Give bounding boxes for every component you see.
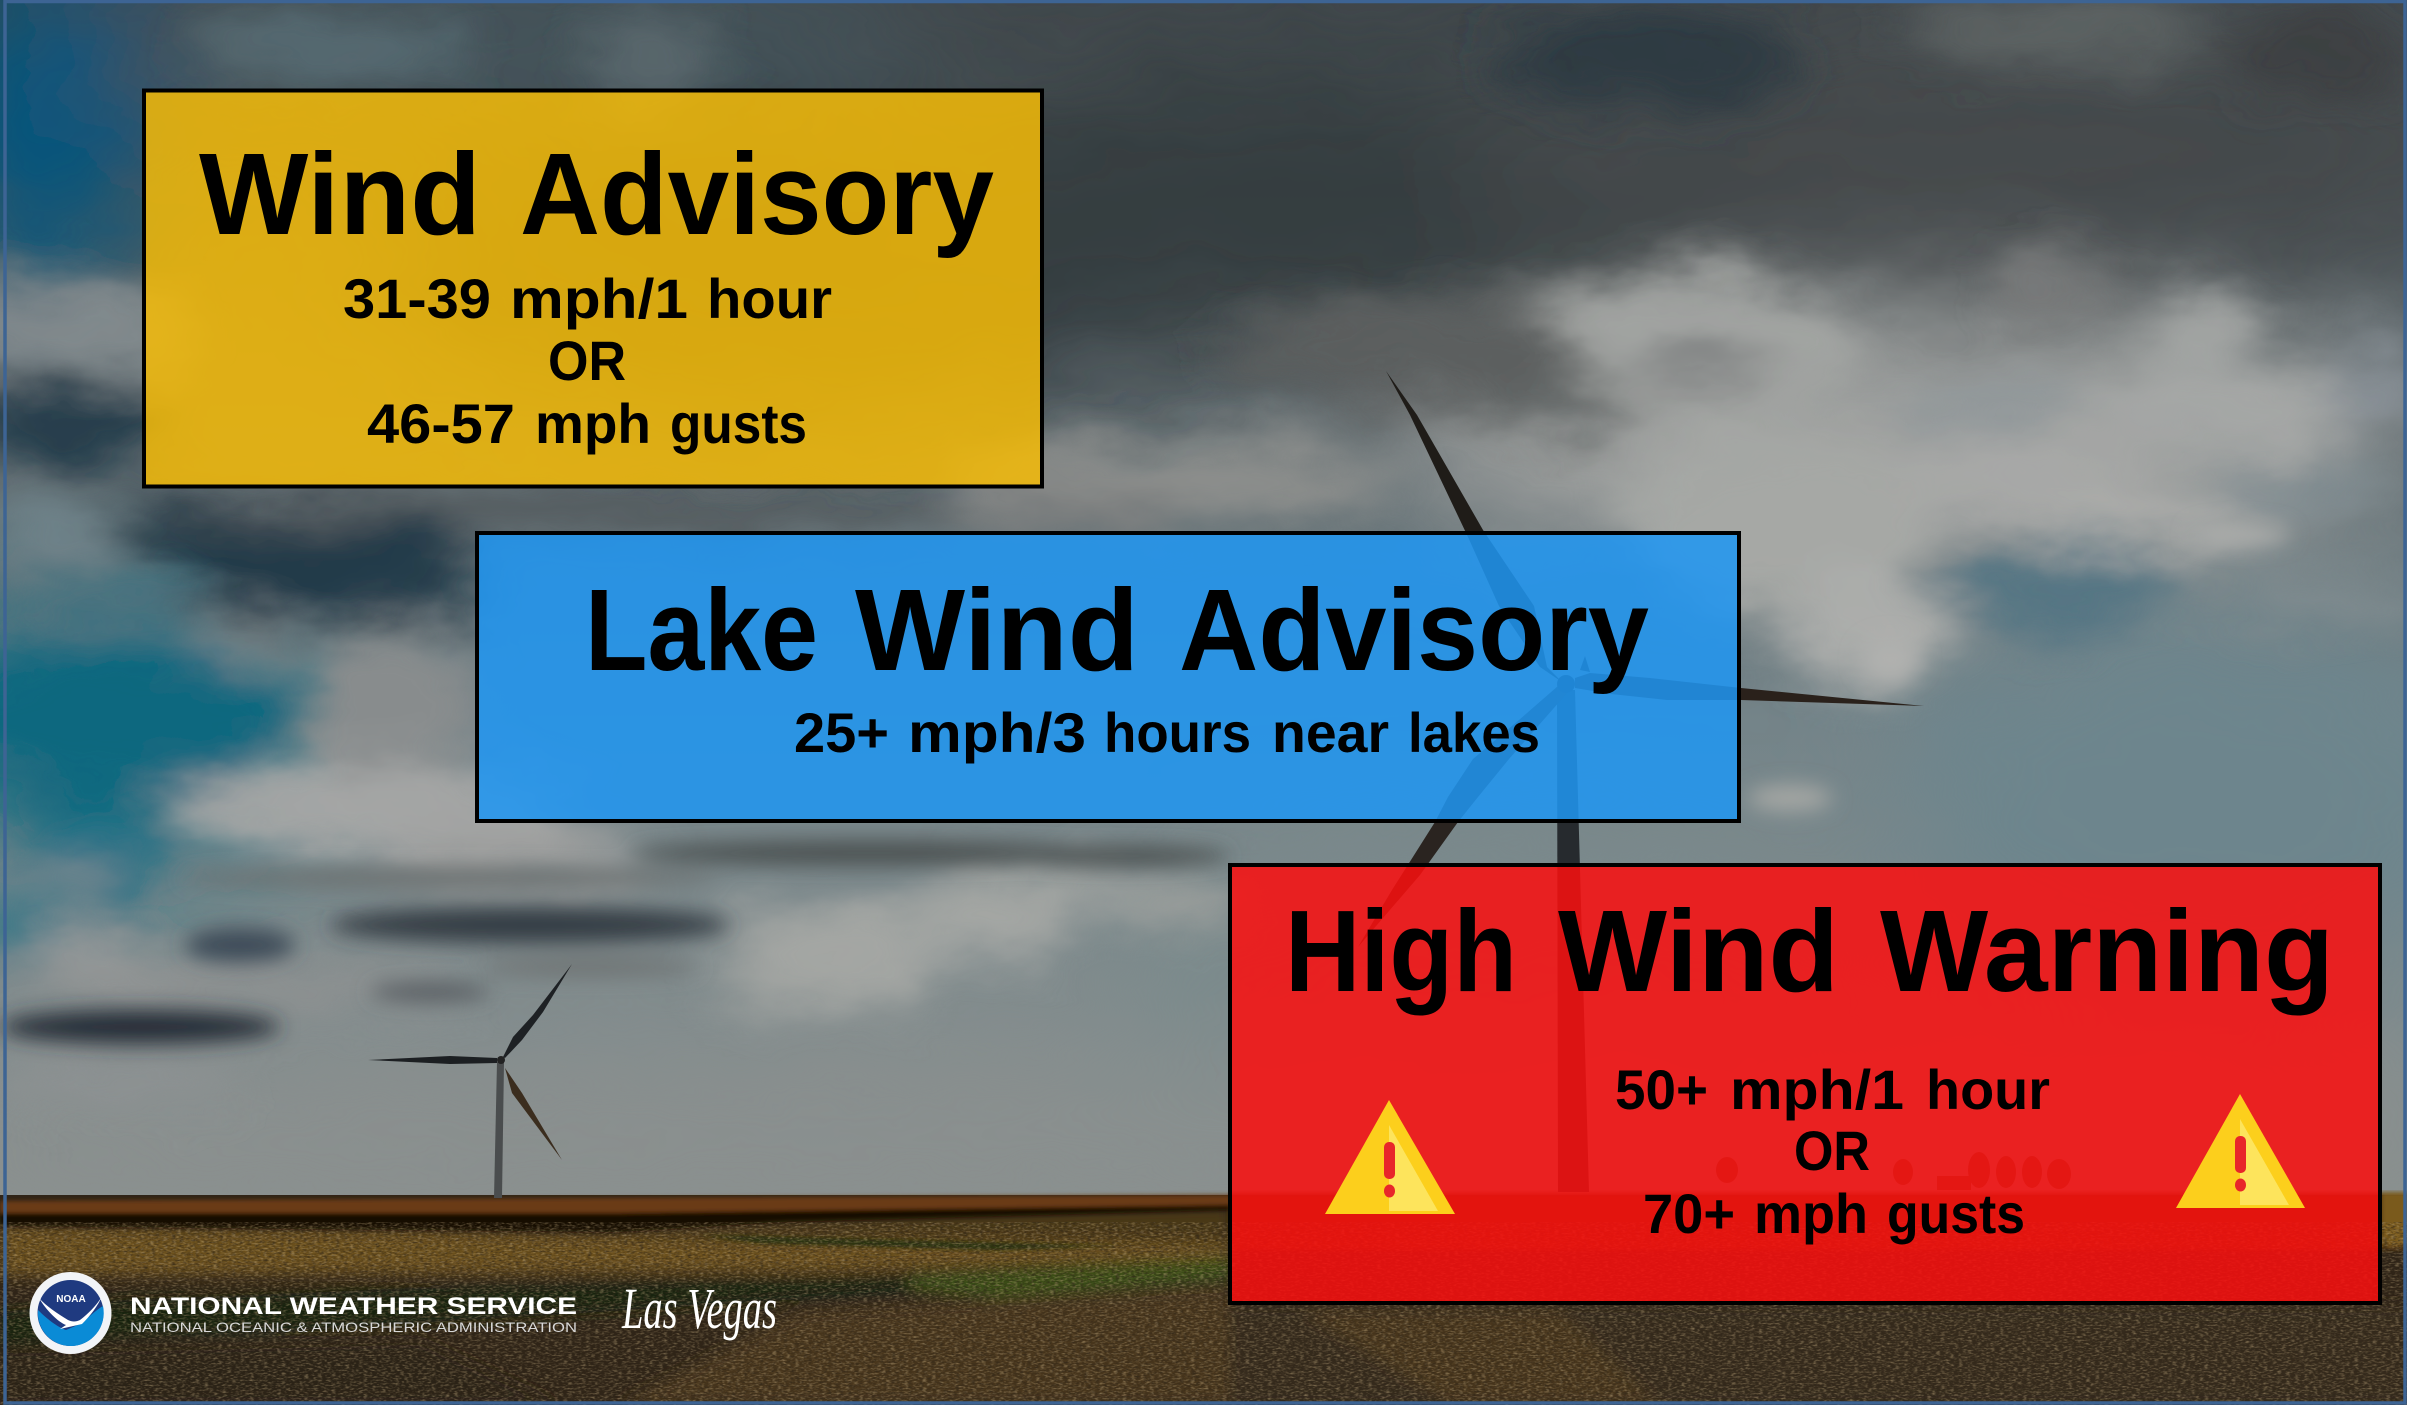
icon: left warning triangle xyxy=(1325,1100,1455,1214)
text: high wind warning criteria: gusts xyxy=(1887,1182,2025,1245)
text: high wind warning criteria: hour xyxy=(1926,1058,2050,1121)
heading: high wind warning: Warning xyxy=(1880,886,2334,1016)
panel: high wind warning xyxy=(1230,865,2380,1303)
heading: high wind warning xyxy=(1285,886,2334,1016)
text: high wind warning criteria: mph xyxy=(1754,1182,1868,1245)
heading: high wind warning: High xyxy=(1285,886,1517,1016)
text: high wind warning criteria: OR xyxy=(1794,1119,1870,1182)
logo: NOAA seal: NOAA xyxy=(56,1294,86,1305)
text: lake wind advisory criteria: lakes xyxy=(1408,701,1540,764)
text: lake wind advisory criteria xyxy=(794,701,1540,764)
heading: lake wind advisory: Wind xyxy=(855,565,1139,695)
heading: wind advisory xyxy=(199,129,994,259)
white margin at right edge xyxy=(2407,0,2416,1405)
panel: wind advisory xyxy=(144,90,1042,486)
panel: lake wind advisory xyxy=(477,533,1739,821)
text: wind advisory criteria: OR xyxy=(548,329,626,392)
text: high wind warning criteria xyxy=(1615,1058,2050,1245)
background: farm field and soil xyxy=(0,1192,2416,1405)
text: lake wind advisory criteria: near xyxy=(1272,701,1389,764)
text: high wind warning criteria: 70+ xyxy=(1643,1182,1735,1245)
distant farmhouse and tree line xyxy=(1716,1152,2071,1190)
text: lake wind advisory criteria: hours xyxy=(1104,701,1251,764)
text: wind advisory criteria: gusts xyxy=(670,392,807,455)
text: wind advisory criteria: mph xyxy=(535,392,651,455)
text: high wind warning criteria: 50+ xyxy=(1615,1058,1708,1121)
logo text: national weather service xyxy=(130,1293,577,1335)
text: lake wind advisory criteria: 25+ xyxy=(794,701,889,764)
heading: lake wind advisory: Lake xyxy=(585,565,818,695)
heading: high wind warning: Wind xyxy=(1558,886,1839,1016)
text: wind advisory criteria: hour xyxy=(707,267,832,330)
logo text: national weather service: NATIONAL WEATHER SERVICE xyxy=(130,1293,577,1320)
logo text: national weather service: NATIONAL OCEANIC & ATMOSPHERIC ADMINISTRATION xyxy=(130,1319,577,1335)
heading: lake wind advisory xyxy=(585,565,1649,695)
large wind turbine xyxy=(1358,371,1924,1192)
heading: wind advisory: Advisory xyxy=(520,129,994,259)
heading: lake wind advisory: Advisory xyxy=(1179,565,1649,695)
text: wind advisory criteria: mph/1 xyxy=(510,267,688,330)
text: lake wind advisory criteria: mph/3 xyxy=(908,701,1086,764)
logo text: las vegas: Las Vegas xyxy=(621,1276,777,1341)
text: wind advisory criteria: 46-57 xyxy=(367,392,515,455)
text: wind advisory criteria xyxy=(343,267,832,455)
small wind turbine xyxy=(368,964,572,1198)
heading: wind advisory: Wind xyxy=(199,129,481,259)
icon: right warning triangle xyxy=(2176,1094,2305,1208)
logo: NOAA seal xyxy=(30,1272,112,1354)
text: wind advisory criteria: 31-39 xyxy=(343,267,491,330)
text: high wind warning criteria: mph/1 xyxy=(1730,1058,1904,1121)
